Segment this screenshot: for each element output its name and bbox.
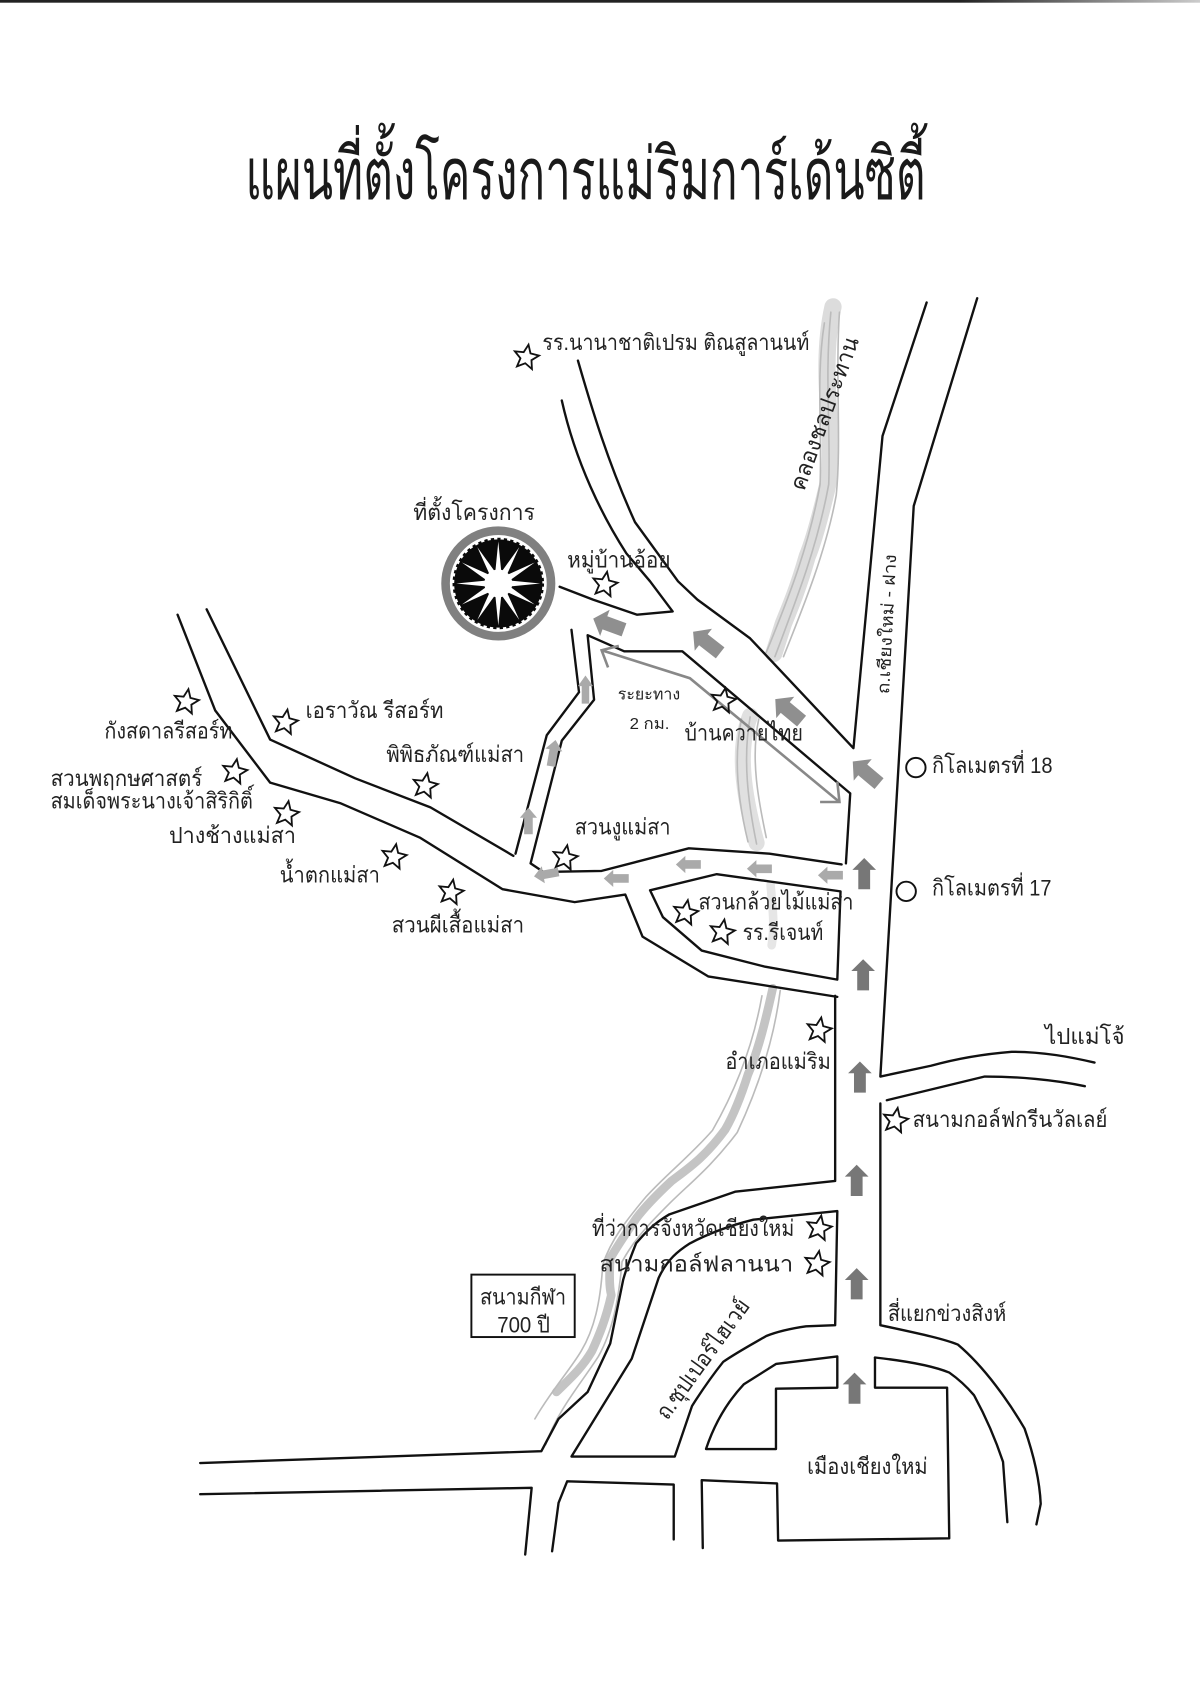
map labels: กิโลเมตรที่ 17	[932, 872, 1051, 901]
map labels: กิโลเมตรที่ 18	[932, 749, 1053, 778]
icon: project location wheel	[446, 531, 551, 636]
scan edge at top of page	[0, 0, 1200, 3]
map labels: สนามกอล์ฟกรีนวัลเลย์	[913, 1106, 1107, 1132]
map labels: กังสดาลรีสอร์ท	[104, 717, 232, 744]
map labels: สวนพฤกษศาสตร์	[51, 765, 202, 791]
map labels: เมืองเชียงใหม่	[807, 1453, 928, 1479]
map labels: สวนผีเสื้อแม่สา	[392, 908, 524, 937]
map labels: หมู่บ้านอ้อย	[567, 547, 670, 573]
map labels: สนามกีฬา	[480, 1285, 566, 1310]
stadium box	[471, 1275, 575, 1337]
map labels: ปางช้างแม่สา	[169, 823, 296, 848]
map labels: รร.นานาชาติเปรม ติณสูลานนท์	[542, 329, 809, 356]
map labels: อำเภอแม่ริม	[725, 1049, 831, 1074]
map labels: ถ.เชียงใหม่ - ฝาง	[873, 554, 900, 695]
map labels: ที่ว่าการจังหวัดเชียงใหม่	[592, 1212, 794, 1241]
map labels: ไปแม่โจ้	[1043, 1023, 1125, 1049]
map labels: คลองชลประทาน	[785, 333, 864, 494]
map labels: ระยะทาง	[618, 686, 680, 704]
map labels: 700 ปี	[497, 1313, 550, 1338]
map labels: สวนกล้วยไม้แม่สา	[698, 889, 853, 915]
map labels: สมเด็จพระนางเจ้าสิริกิติ์	[51, 783, 255, 813]
map labels: สี่แยกข่วงสิงห์	[888, 1297, 1006, 1326]
map labels: รร.รีเจนท์	[743, 919, 823, 945]
map labels: น้ำตกแม่สา	[280, 859, 380, 888]
2 km distance arrow	[602, 646, 839, 802]
map labels: เอราวัณ รีสอร์ท	[306, 697, 443, 723]
map labels: 2 กม.	[630, 715, 669, 733]
route arrows	[520, 605, 888, 1404]
map labels: ที่ตั้งโครงการ	[413, 496, 535, 525]
map labels: สวนงูแม่สา	[575, 814, 670, 840]
map labels: สนามกอล์ฟลานนา	[599, 1250, 793, 1276]
roads	[178, 298, 1095, 1555]
kilometre markers	[897, 758, 926, 901]
canals and rivers	[535, 307, 839, 1445]
map labels	[51, 329, 1125, 1479]
map labels: พิพิธภัณฑ์แม่สา	[386, 741, 524, 767]
map labels: บ้านควายไทย	[684, 720, 803, 746]
landmark stars	[172, 343, 910, 1276]
map labels: ถ.ซุปเปอร์ไฮเวย์	[650, 1294, 756, 1425]
